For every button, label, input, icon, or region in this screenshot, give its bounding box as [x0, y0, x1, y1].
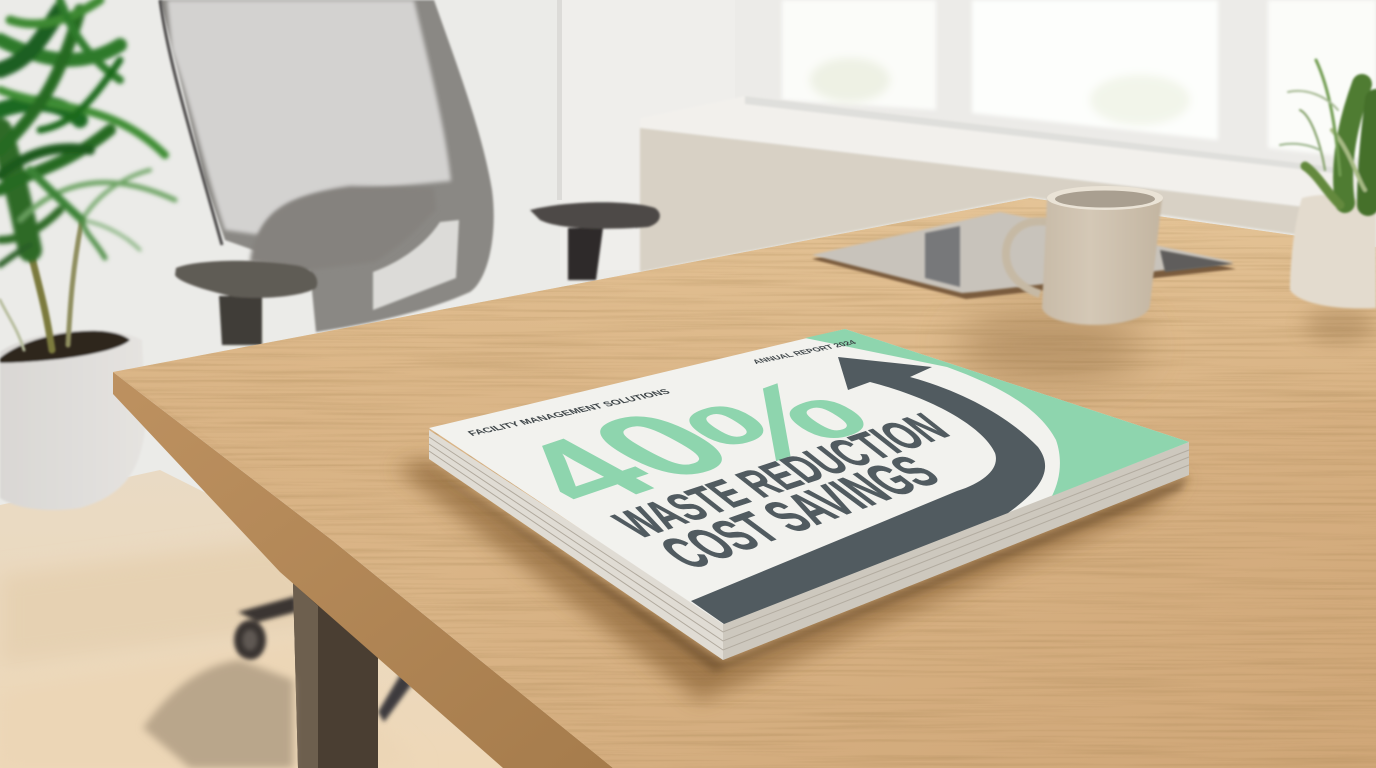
chair base and caster [234, 596, 412, 722]
potted plant left [0, 0, 175, 510]
sill lower wall [640, 128, 1312, 272]
plant stems [0, 220, 82, 350]
plant fronds [0, 0, 175, 265]
window panes [782, 0, 1376, 160]
plant pot right [1280, 60, 1376, 308]
heading: waste reduction: WASTE REDUCTION [602, 406, 961, 546]
mug rim [1047, 186, 1163, 210]
chair lumbar support [250, 186, 436, 270]
pot [1290, 195, 1376, 308]
heading: cost savings: COST SAVINGS [646, 448, 954, 578]
annual report booklet [429, 329, 1189, 660]
left armrest [175, 261, 317, 345]
tablet [812, 212, 1236, 299]
plant [1280, 60, 1376, 205]
green corner panel [805, 329, 1189, 496]
desk leg [293, 583, 378, 768]
label: annual report: ANNUAL REPORT 2024 [751, 339, 859, 366]
desk [113, 197, 1376, 768]
book cast shadow [395, 458, 1189, 700]
cover [429, 329, 1189, 624]
heading: 40: 40 [471, 392, 774, 526]
window sill [640, 96, 1376, 208]
wood grain [113, 197, 1376, 768]
desk top [113, 198, 1376, 768]
chair window gap [373, 220, 459, 310]
chair back frame [160, 0, 494, 332]
heading: percent sign: % [651, 359, 903, 486]
upward arrow [691, 357, 1045, 624]
page stack [429, 430, 1189, 660]
mug handle [1006, 221, 1048, 294]
mug body [1042, 199, 1162, 325]
chair mesh [167, 0, 451, 235]
floor [0, 470, 640, 768]
mug shadow [955, 307, 1376, 383]
label: facility management solutions: FACILITY MANAGEMENT SOLUTIONS [465, 387, 673, 438]
tablet reflection [925, 226, 960, 287]
right armrest [530, 202, 660, 280]
pot [0, 330, 146, 510]
desk side edge [113, 372, 613, 768]
floor shadow [143, 660, 293, 768]
coffee mug [1006, 186, 1163, 325]
office chair [160, 0, 660, 722]
window with sill [640, 0, 1376, 272]
